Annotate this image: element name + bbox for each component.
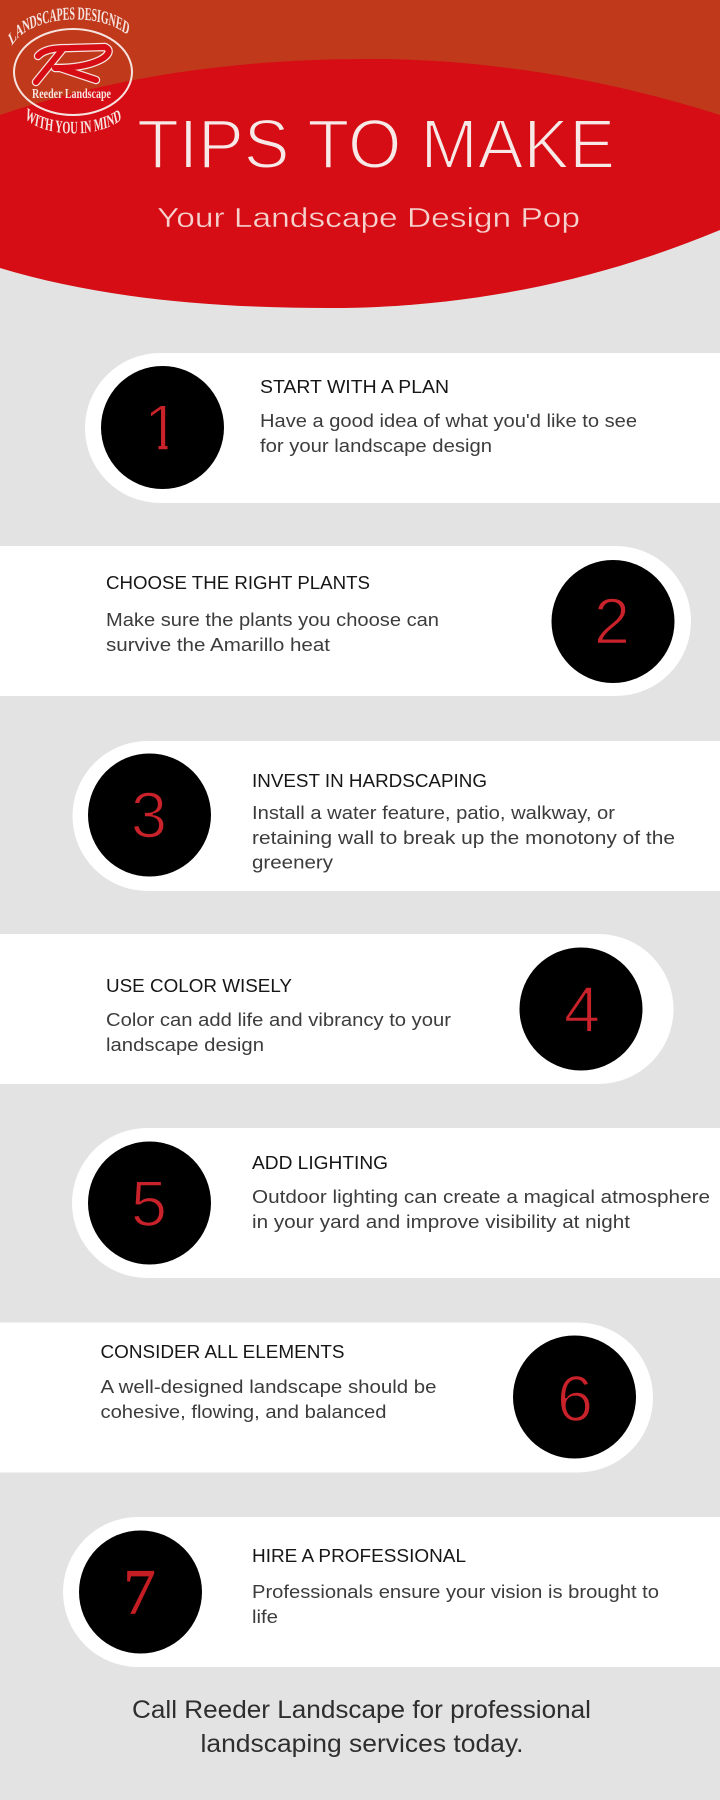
heading tip 7: HIRE A PROFESSIONAL <box>252 1546 466 1566</box>
number badge 5 <box>88 1142 211 1264</box>
heading tip 5: ADD LIGHTING <box>252 1153 388 1173</box>
number badge 2: 2 <box>594 584 630 658</box>
number badge 2 <box>552 560 674 683</box>
heading tip 1: START WITH A PLAN <box>260 377 449 397</box>
body tip 2: survive the Amarillo heat <box>106 634 330 655</box>
body tip 3 <box>252 802 675 872</box>
number badge 5: 5 <box>131 1167 167 1240</box>
heading tip 3: INVEST IN HARDSCAPING <box>252 771 487 791</box>
body tip 4: landscape design <box>106 1034 264 1055</box>
call to action footer: Call Reeder Landscape for professional <box>132 1696 591 1724</box>
body tip 6: A well-designed landscape should be <box>100 1376 436 1397</box>
body tip 1: for your landscape design <box>260 435 492 456</box>
number badge 3 <box>88 754 211 876</box>
logo: Reeder Landscape: Reeder Landscape <box>32 87 111 102</box>
body tip 1 <box>260 410 637 456</box>
body tip 5 <box>252 1186 710 1232</box>
call to action footer <box>132 1696 591 1758</box>
body tip 5: Outdoor lighting can create a magical atmosphere <box>252 1186 710 1207</box>
panel: tip 7 <box>63 1517 720 1667</box>
body tip 2: Make sure the plants you choose can <box>106 609 439 630</box>
body tip 2 <box>106 609 439 655</box>
body tip 7: life <box>252 1606 278 1627</box>
title: TIPS TO MAKE <box>137 105 615 183</box>
number badge 6: 6 <box>557 1362 593 1435</box>
number badge 1 <box>101 366 224 489</box>
body tip 6 <box>100 1376 436 1422</box>
number badge 6 <box>513 1336 636 1458</box>
number badge 3: 3 <box>131 778 167 852</box>
panel: tip 2 <box>0 546 691 696</box>
body tip 7: Professionals ensure your vision is brought to <box>252 1581 659 1602</box>
panel: tip 6 <box>0 1322 653 1472</box>
number badge 4: 4 <box>564 972 600 1046</box>
panel: tip 3 <box>72 741 720 891</box>
call to action footer: landscaping services today. <box>200 1730 524 1758</box>
body tip 5: in your yard and improve visibility at night <box>252 1211 630 1232</box>
panel: tip 4 <box>0 934 674 1084</box>
logo: Reeder Landscape <box>8 7 133 134</box>
body tip 4: Color can add life and vibrancy to your <box>106 1009 451 1030</box>
number badge 1: 1 <box>144 391 180 464</box>
body tip 7 <box>252 1581 659 1627</box>
subtitle: Your Landscape Design Pop <box>157 202 580 233</box>
panel: tip 1 <box>85 353 720 503</box>
heading tip 6: CONSIDER ALL ELEMENTS <box>100 1342 344 1362</box>
heading tip 2: CHOOSE THE RIGHT PLANTS <box>106 573 370 593</box>
number badge 7 <box>79 1530 202 1654</box>
number badge 7: 7 <box>123 1556 156 1628</box>
body tip 3: greenery <box>252 852 334 872</box>
logo: Reeder Landscape: WITH YOU IN MIND <box>27 108 121 134</box>
body tip 6: cohesive, flowing, and balanced <box>100 1401 386 1422</box>
panel: tip 5 <box>72 1128 720 1278</box>
number badge 4 <box>520 948 642 1070</box>
heading tip 4: USE COLOR WISELY <box>106 976 292 996</box>
body tip 3: Install a water feature, patio, walkway, or <box>252 802 615 823</box>
logo: Reeder Landscape: LANDSCAPES DESIGNED <box>8 7 130 46</box>
body tip 3: retaining wall to break up the monotony of the <box>252 827 675 848</box>
body tip 1: Have a good idea of what you'd like to see <box>260 410 637 431</box>
header band <box>0 0 720 308</box>
body tip 4 <box>106 1009 451 1055</box>
